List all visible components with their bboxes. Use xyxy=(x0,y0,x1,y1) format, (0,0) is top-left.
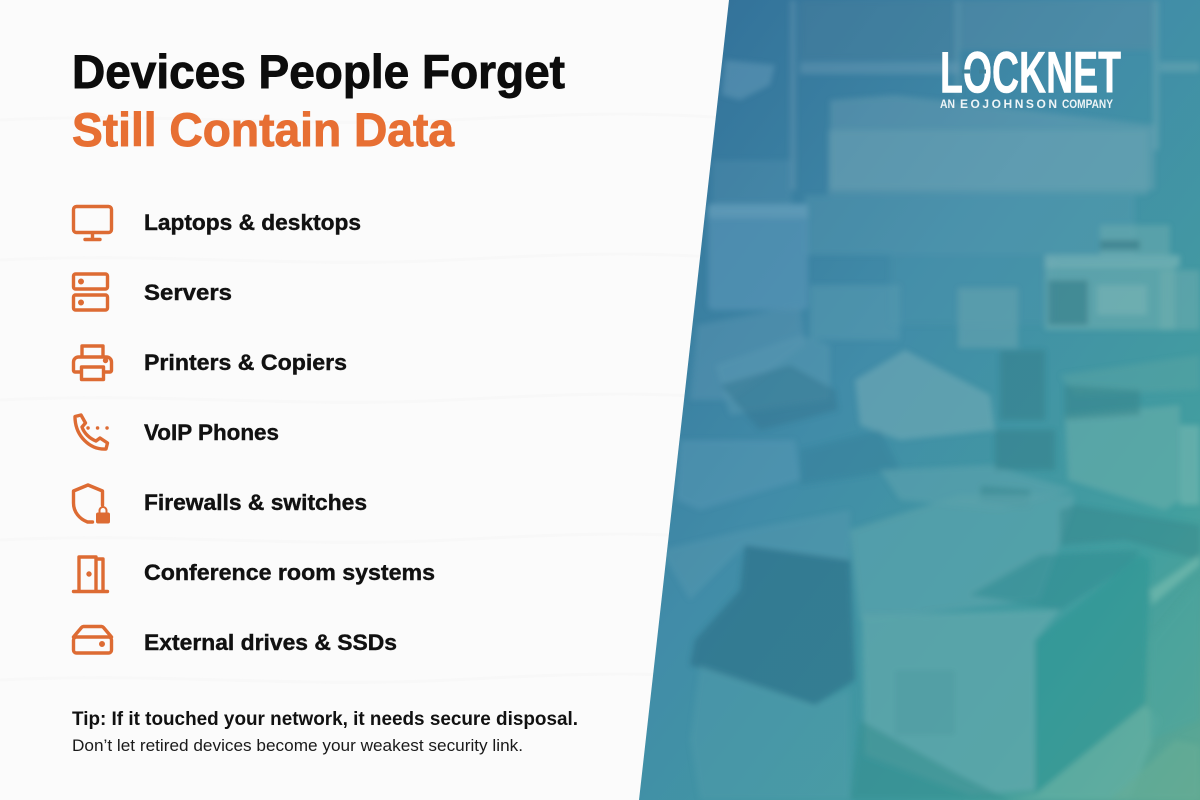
logo tagline: EOJOHNSON xyxy=(960,97,1057,111)
logo tagline: COMPANY xyxy=(1062,97,1113,111)
list item: printers and copiers: Printers & Copiers xyxy=(144,350,347,375)
tip text: Tip: If it touched your network, it needs secure disposal. xyxy=(72,709,578,730)
icon: monitor xyxy=(74,206,112,240)
wooden floor slats xyxy=(1133,744,1194,798)
tip text xyxy=(72,709,578,755)
title: Devices People Forget xyxy=(72,45,565,98)
list item: firewalls and switches xyxy=(74,485,367,523)
list item: external drives and SSDs: External drives & SSDs xyxy=(144,630,397,655)
list item: VoIP phones: VoIP Phones xyxy=(144,420,279,445)
icon: server xyxy=(74,274,108,310)
right lower details xyxy=(1060,507,1200,556)
list item: firewalls and switches: Firewalls & switches xyxy=(144,490,367,515)
box stack xyxy=(830,95,1155,190)
panel: tinted photo of stacked printers xyxy=(600,0,1200,800)
lower floor xyxy=(853,724,996,798)
dark printer left xyxy=(690,545,855,705)
list item: conference room systems xyxy=(74,557,435,592)
icon: drive xyxy=(74,626,112,653)
list item: VoIP phones xyxy=(75,415,279,449)
list item: external drives and SSDs xyxy=(74,626,397,655)
tip text: Don’t let retired devices become your weakest security link. xyxy=(72,736,523,755)
icon: printer xyxy=(74,346,112,380)
list item: printers and copiers xyxy=(74,346,347,380)
panel: left white background xyxy=(0,0,760,800)
list item: servers: Servers xyxy=(144,280,232,305)
central printers xyxy=(855,350,995,440)
logo tagline: AN xyxy=(940,97,955,111)
upper shelving xyxy=(790,0,796,190)
large central printer xyxy=(850,495,1075,620)
logo: LOCKNET xyxy=(940,40,1121,111)
icon: shield with lock xyxy=(74,485,110,523)
logo stencil slits in the O xyxy=(962,70,986,74)
list item: servers xyxy=(74,274,232,310)
title xyxy=(72,45,565,156)
icon: phone xyxy=(75,415,108,449)
list item: conference room systems: Conference room systems xyxy=(144,560,435,585)
title: Still Contain Data xyxy=(72,103,455,156)
mid left band xyxy=(676,440,800,510)
logo tagline xyxy=(940,97,1113,111)
list item: laptops and desktops: Laptops & desktops xyxy=(144,210,361,235)
left printer stack xyxy=(722,60,775,100)
right printers xyxy=(1065,405,1180,510)
icon: door xyxy=(74,557,108,592)
list item: laptops and desktops xyxy=(74,206,361,240)
